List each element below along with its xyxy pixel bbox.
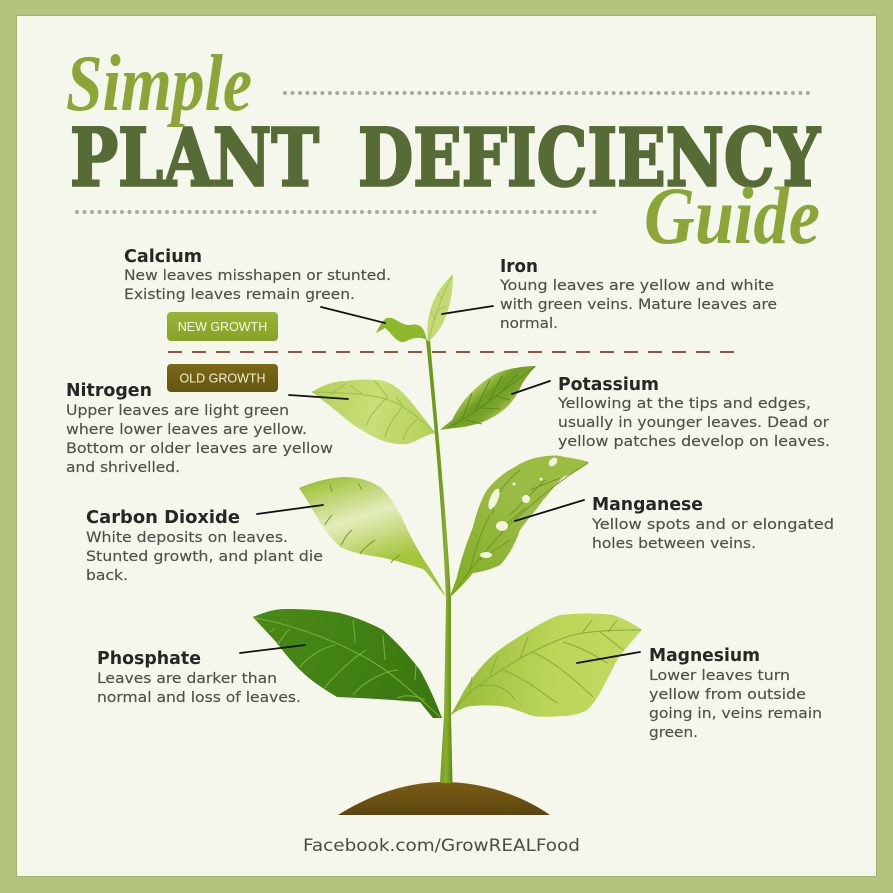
callout: phosphate: normal and loss of leaves. bbox=[97, 690, 301, 706]
title words: Plant Deficiency bbox=[70, 110, 821, 204]
callout: magnesium: Lower leaves turn bbox=[649, 668, 790, 684]
callout: manganese: holes between veins. bbox=[592, 536, 756, 552]
callout: potassium: Potassium bbox=[558, 375, 659, 395]
callout: iron: normal. bbox=[500, 316, 558, 332]
callout: potassium bbox=[557, 375, 830, 450]
callout: manganese bbox=[591, 495, 834, 552]
leaf: carbon dioxide bbox=[299, 477, 446, 597]
callout: phosphate: Leaves are darker than bbox=[97, 671, 277, 687]
callout: magnesium: going in, veins remain bbox=[649, 706, 822, 722]
title word: Simple: Simple bbox=[66, 40, 252, 128]
callout: magnesium: yellow from outside bbox=[649, 687, 806, 703]
callout: carbon dioxide bbox=[86, 508, 323, 584]
callout: iron: Young leaves are yellow and white bbox=[499, 278, 774, 294]
callout: iron: with green veins. Mature leaves are bbox=[500, 297, 777, 313]
callout: potassium: usually in younger leaves. Dead or bbox=[558, 415, 829, 431]
new growth badge bbox=[167, 312, 278, 341]
callout: nitrogen: Nitrogen bbox=[66, 381, 152, 401]
callout: nitrogen: Upper leaves are light green bbox=[66, 403, 289, 419]
callout: carbon dioxide: Carbon Dioxide bbox=[86, 508, 240, 528]
callout: calcium: Calcium bbox=[124, 247, 202, 267]
dotted rule top bbox=[285, 91, 808, 95]
stem bbox=[426, 340, 452, 783]
callout: manganese: Manganese bbox=[592, 495, 703, 515]
growth divider dashed line bbox=[168, 351, 736, 353]
old growth badge: OLD GROWTH bbox=[179, 372, 266, 386]
callout: phosphate bbox=[97, 649, 301, 706]
pointer lines bbox=[240, 306, 640, 663]
leaf: phosphate bbox=[253, 609, 442, 718]
leaf: manganese bbox=[450, 456, 589, 597]
callout: phosphate: Phosphate bbox=[97, 649, 201, 669]
callout: calcium bbox=[124, 247, 391, 303]
leaf: iron bbox=[427, 274, 453, 342]
title bbox=[66, 40, 821, 261]
callout: nitrogen: and shrivelled. bbox=[66, 460, 180, 476]
footer link: Facebook.com/GrowREALFood bbox=[303, 836, 580, 856]
callout: potassium: Yellowing at the tips and edges, bbox=[557, 396, 811, 412]
callout: calcium: Existing leaves remain green. bbox=[124, 287, 355, 303]
title word: Guide: Guide bbox=[644, 170, 820, 261]
callout: nitrogen: where lower leaves are yellow. bbox=[66, 422, 307, 438]
callout: magnesium: green. bbox=[649, 725, 698, 741]
soil mound bbox=[338, 782, 550, 815]
callout: carbon dioxide: Stunted growth, and plant die bbox=[86, 549, 323, 565]
plant illustration bbox=[253, 274, 642, 815]
callout: carbon dioxide: White deposits on leaves. bbox=[86, 530, 288, 546]
new growth badge: NEW GROWTH bbox=[178, 320, 267, 334]
dotted rule bottom bbox=[77, 210, 602, 214]
callout: nitrogen: Bottom or older leaves are yellow bbox=[66, 441, 333, 457]
callout: calcium: New leaves misshapen or stunted. bbox=[124, 268, 391, 284]
leaf: magnesium bbox=[451, 614, 642, 717]
manganese spots bbox=[480, 456, 559, 558]
leaf: calcium bbox=[376, 318, 427, 342]
old growth badge bbox=[167, 364, 278, 392]
callout: potassium: yellow patches develop on leaves. bbox=[558, 434, 830, 450]
callout: iron bbox=[499, 257, 777, 332]
callout: magnesium: Magnesium bbox=[649, 646, 760, 666]
leaf: nitrogen bbox=[312, 380, 435, 444]
title words: Plant Deficiency: PLANT bbox=[70, 110, 319, 204]
leaf: potassium bbox=[440, 366, 536, 430]
callout: carbon dioxide: back. bbox=[86, 568, 128, 584]
callout: manganese: Yellow spots and or elongated bbox=[591, 517, 834, 533]
callout: iron: Iron bbox=[500, 257, 538, 277]
callout: nitrogen bbox=[66, 381, 333, 476]
callout: magnesium bbox=[649, 646, 822, 741]
